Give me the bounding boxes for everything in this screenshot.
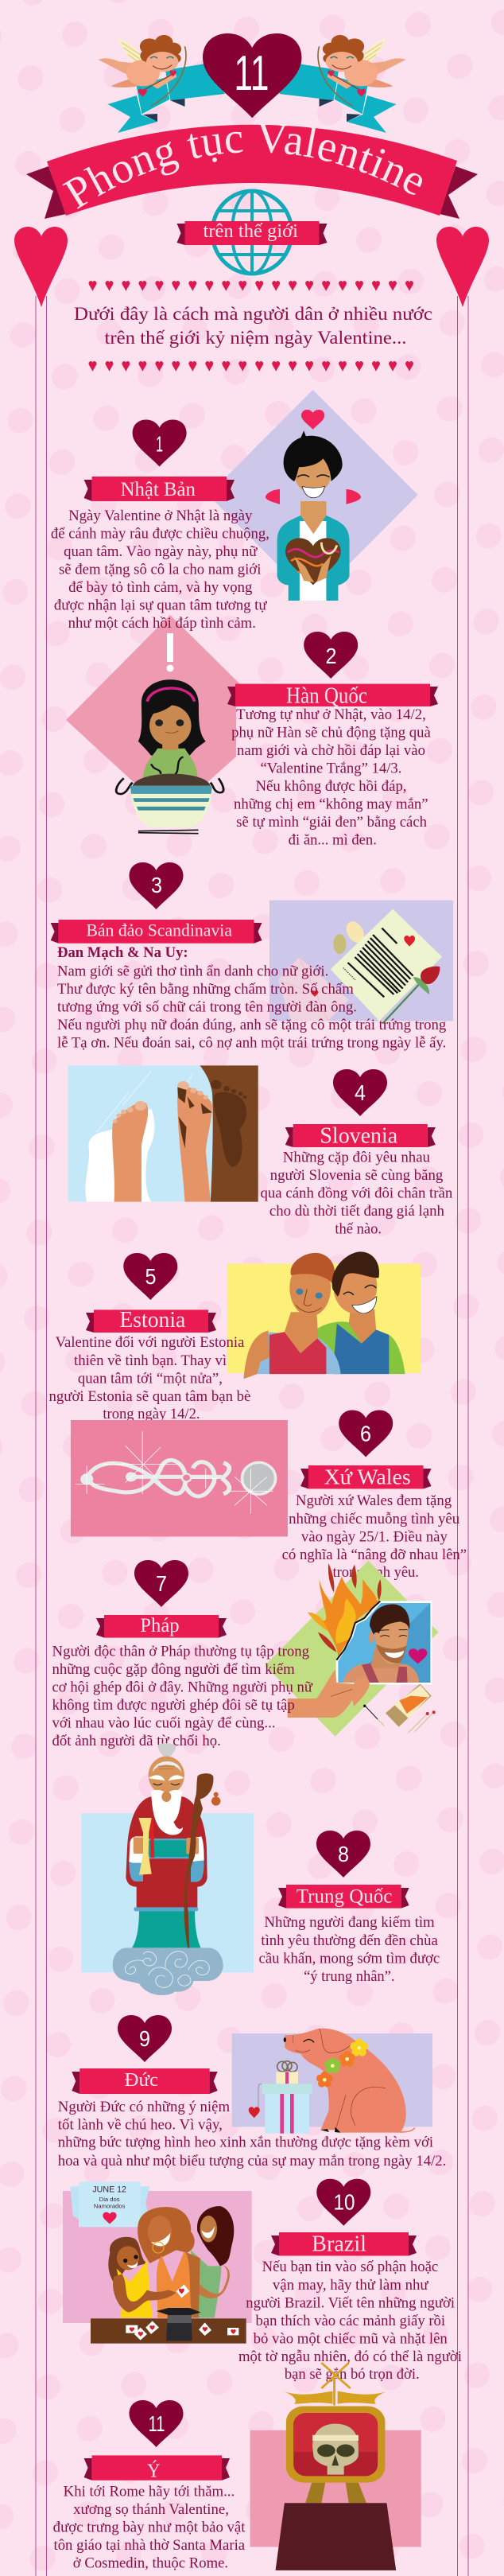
heart number 2: 2 bbox=[326, 644, 337, 668]
illustration: love spoon bbox=[71, 1420, 288, 1536]
heart number 10: 10 bbox=[334, 2190, 355, 2215]
subtitle banner bbox=[176, 221, 328, 245]
text: France: đốt ảnh người đã từ chối họ. bbox=[52, 1734, 221, 1749]
intro text: Dưới đây là cách mà người dân ở nhiều nước bbox=[74, 304, 432, 324]
banner: Scandinavia: Bán đảo Scandinavia bbox=[86, 920, 232, 940]
heart number 7: 7 bbox=[156, 1571, 167, 1596]
big heart: 11: 11 bbox=[234, 46, 269, 101]
banner: Hàn Quốc bbox=[227, 684, 438, 709]
text: France: với nhau vào lúc cuối ngày để cùng... bbox=[52, 1715, 275, 1731]
heart number 4: 4 bbox=[355, 1080, 366, 1105]
icon: globe bbox=[212, 191, 292, 274]
text: Korea: nam giới và chờ hồi đáp lại vào bbox=[237, 743, 425, 759]
banner: Ý: Ý bbox=[147, 2461, 160, 2482]
heart number 11: 11 bbox=[148, 2411, 165, 2436]
heart number 11 bbox=[129, 2400, 183, 2447]
text: Wales: Người xứ Wales đem tặng bbox=[296, 1493, 452, 1509]
text: Slovenia: Những cặp đôi yêu nhau bbox=[283, 1150, 430, 1166]
text: Scandinavia: Nam giới sẽ gửi thơ tình ẩn danh cho nữ giới. bbox=[57, 964, 328, 980]
header panel bbox=[14, 33, 489, 307]
heart number 10 bbox=[316, 2179, 370, 2226]
text: Korea: sẽ tự mình “giải đen” bằng cách bbox=[236, 815, 427, 831]
text: China: Những người đang kiếm tìm bbox=[264, 1915, 435, 1931]
panel: 8 China bbox=[81, 1743, 440, 1995]
intro text: trên thế giới kỷ niệm ngày Valentine... bbox=[105, 328, 406, 348]
banner: Pháp bbox=[96, 1615, 227, 1638]
heart number 8 bbox=[316, 1831, 370, 1878]
text: Korea bbox=[231, 707, 431, 848]
text: Wales: vào ngày 25/1. Điều này bbox=[301, 1529, 448, 1545]
text: France: những cuộc gặp đông người để tìm kiếm bbox=[52, 1662, 295, 1678]
illustration: women drawing names: JUNE 12 bbox=[92, 2185, 126, 2195]
text: France: Người độc thân ở Pháp thường tụ tập trong bbox=[52, 1644, 309, 1660]
text: Wales: có nghĩa là “nâng đỡ nhau lên” bbox=[282, 1547, 467, 1563]
banner: Nhật Bản: Nhật Bản bbox=[121, 479, 196, 500]
text: Korea: Tương tự như ở Nhật, vào 14/2, bbox=[236, 707, 426, 723]
banner: Brazil: Brazil bbox=[312, 2232, 366, 2256]
text: Italy: ở Cosmedin, thuộc Rome. bbox=[73, 2555, 228, 2571]
text: Germany: Người Đức có những ý niệm bbox=[58, 2099, 231, 2115]
text: Brazil: bạn sẽ gắn bó trọn đời. bbox=[285, 2367, 420, 2383]
text: Estonia: trong ngày 14/2. bbox=[103, 1407, 200, 1422]
text: Italy: xương sọ thánh Valentine, bbox=[73, 2502, 229, 2518]
text: Slovenia bbox=[261, 1150, 452, 1238]
row of small hearts top bbox=[89, 281, 413, 291]
text: Germany: tốt lành về chú heo. Vì vậy, bbox=[58, 2117, 223, 2133]
panel: 6 Wales bbox=[71, 1410, 467, 1581]
illustration: women drawing names: Namorados bbox=[94, 2203, 126, 2210]
text: Slovenia: cho dù thời tiết đang giá lạnh bbox=[269, 1204, 444, 1220]
text: Japan: Ngày Valentine ở Nhật là ngày bbox=[68, 508, 253, 524]
heart number 6 bbox=[339, 1410, 393, 1457]
banner: Xứ Wales: Xứ Wales bbox=[324, 1465, 411, 1488]
heart number 5: 5 bbox=[145, 1264, 156, 1289]
text: Japan: được nhận lại sự quan tâm tương tự bbox=[54, 598, 268, 614]
subtitle banner: trên thế giới bbox=[204, 221, 298, 242]
illustration: Yue Lao bbox=[81, 1743, 254, 1995]
heart number 1 bbox=[133, 420, 187, 466]
right ribbon and cupid bbox=[279, 35, 406, 133]
text: Slovenia: người Slovenia sẽ cùng băng bbox=[270, 1168, 443, 1184]
banner: Slovenia bbox=[285, 1124, 436, 1149]
text: Brazil: vận may, hãy thử làm như bbox=[273, 2278, 429, 2294]
panel: 4 Slovenia bbox=[68, 1065, 452, 1238]
text: Japan: sẽ đem tặng sô cô la cho nam giới bbox=[59, 562, 261, 578]
text: Estonia bbox=[49, 1335, 250, 1422]
heart number 5 bbox=[123, 1253, 177, 1300]
illustration: man with chocolate bbox=[208, 390, 418, 601]
text: Korea: phụ nữ Hàn sẽ chủ động tặng quà bbox=[231, 726, 431, 741]
panel: 1 Japan bbox=[51, 390, 418, 632]
text: Japan bbox=[51, 508, 269, 632]
text: China: tình yêu thường đến đền chùa bbox=[261, 1933, 438, 1949]
text: Brazil: bỏ vào một chiếc mũ và nhặt lên bbox=[254, 2331, 448, 2347]
heart number 7 bbox=[134, 1560, 188, 1607]
heart number 3: 3 bbox=[151, 873, 162, 897]
banner: Hàn Quốc: Hàn Quốc bbox=[286, 684, 367, 709]
text: Scandinavia bbox=[57, 945, 446, 1052]
panel: 10 Brazil bbox=[63, 2179, 462, 2383]
panel: 2 South Korea bbox=[66, 615, 438, 848]
text: Brazil: một tờ ngẫu nhiên, đó có thể là người bbox=[238, 2349, 462, 2365]
heart number 3 bbox=[129, 862, 183, 909]
text: China: “ý trung nhân”. bbox=[304, 1969, 394, 1985]
text: Wales: trong tình yêu. bbox=[332, 1565, 419, 1581]
title: Phong tục Valentine bbox=[62, 124, 422, 209]
banner: Estonia bbox=[86, 1308, 216, 1333]
text: Estonia: quan tâm tới “một nửa”, bbox=[78, 1372, 223, 1387]
text: China: cầu khấn, mong sớm tìm được bbox=[259, 1951, 440, 1967]
banner: Estonia: Estonia bbox=[119, 1308, 186, 1333]
banner: Ý bbox=[84, 2455, 230, 2482]
banner: Slovenia: Slovenia bbox=[320, 1124, 398, 1149]
text: Estonia: Valentine đối với người Estonia bbox=[56, 1335, 244, 1351]
text: Estonia: người Estonia sẽ quan tâm bạn bè bbox=[49, 1389, 250, 1405]
text: Italy: tôn giáo tại nhà thờ Santa Maria bbox=[54, 2538, 245, 2554]
text: Germany bbox=[58, 2099, 446, 2169]
panel: 9 Germany bbox=[58, 2015, 446, 2169]
illustration: women drawing names: Dia dos bbox=[99, 2196, 120, 2203]
panel: 7 France bbox=[52, 1560, 439, 1749]
text: Scandinavia: Nếu người phụ nữ đoán đúng, anh sẽ tặng cô một trái trứng trong bbox=[57, 1018, 446, 1033]
text: Japan: quan tâm. Vào ngày này, phụ nữ bbox=[64, 544, 258, 560]
text: Slovenia: qua cánh đồng với đôi chân trần bbox=[261, 1186, 452, 1202]
text: France bbox=[52, 1644, 313, 1749]
text: China bbox=[259, 1915, 440, 1985]
banner: Trung Quốc bbox=[278, 1885, 409, 1909]
text: Korea: “Valentine Trắng” 14/3. bbox=[261, 761, 401, 776]
main red ribbon bbox=[26, 124, 478, 219]
banner: Brazil bbox=[271, 2232, 417, 2256]
teal ribbons with cupids bbox=[98, 35, 406, 133]
text: Italy: được trưng bày như một bảo vật bbox=[53, 2520, 246, 2536]
text: France: không tìm được người ghép đôi sẽ tụ tập bbox=[52, 1698, 295, 1714]
text: Italy: Khi tới Rome hãy tới thăm... bbox=[64, 2484, 235, 2500]
text: Korea: Nếu không được hồi đáp, bbox=[256, 779, 407, 795]
banner: Đức: Đức bbox=[124, 2070, 158, 2091]
text: Brazil: người Brazil. Viết tên những người bbox=[246, 2296, 455, 2312]
banner: Scandinavia bbox=[51, 920, 262, 944]
text: Wales bbox=[282, 1493, 467, 1581]
heart number 4 bbox=[333, 1069, 387, 1116]
left ribbon and cupid bbox=[98, 35, 225, 133]
text: Scandinavia: lễ Tạ ơn. Nếu đoán sai, cô nợ anh một trái trứng trong ngày lễ ấy. bbox=[57, 1036, 446, 1052]
text: France: cơ hội ghép đôi ở đây. Những người phụ nữ bbox=[52, 1680, 313, 1696]
text: Brazil: Nếu bạn tin vào số phận hoặc bbox=[262, 2259, 438, 2275]
banner: Pháp: Pháp bbox=[140, 1615, 180, 1636]
heart number 9: 9 bbox=[139, 2026, 150, 2051]
text: Estonia: thiên về tình bạn. Thay vì bbox=[74, 1353, 227, 1369]
banner: Nhật Bản bbox=[84, 477, 235, 501]
illustration: bare feet bbox=[68, 1065, 258, 1202]
balloon heart left bbox=[14, 227, 68, 307]
text: Korea: đi ăn... mì đen. bbox=[289, 832, 377, 848]
panel: 11 Italy bbox=[53, 2363, 421, 2571]
text: Slovenia: thế nào. bbox=[335, 1222, 382, 1238]
text: Germany: những bức tượng hình heo xinh xắn thường được tặng kèm với bbox=[58, 2135, 433, 2151]
big heart: 11 bbox=[203, 33, 301, 118]
text: Italy bbox=[53, 2484, 246, 2571]
heart number 6: 6 bbox=[360, 1421, 371, 1446]
balloon heart right bbox=[436, 227, 489, 307]
text: Scandinavia: Đan Mạch & Na Uy: bbox=[57, 945, 188, 961]
illustration: skull of Saint Valentine bbox=[250, 2363, 421, 2570]
illustration: women drawing names bbox=[63, 2181, 252, 2344]
banner: Đức bbox=[72, 2068, 218, 2094]
panel: 5 Estonia bbox=[49, 1251, 421, 1422]
text: Wales: những chiếc muỗng tình yêu bbox=[289, 1512, 459, 1527]
text: Scandinavia: Thư được ký tên bằng những chấm tròn. Số chấm bbox=[57, 982, 354, 998]
text: Brazil: bạn thích vào các mảnh giấy rồi bbox=[256, 2313, 445, 2329]
illustration: girl with noodles bbox=[66, 615, 239, 834]
heart number 2 bbox=[304, 632, 358, 679]
panel: 3 Scandinavia bbox=[51, 862, 453, 1052]
heart number 8: 8 bbox=[338, 1842, 349, 1866]
intro text bbox=[74, 304, 432, 348]
text: Japan: như một cách hồi đáp tình cảm. bbox=[68, 616, 256, 632]
text: Germany: hoa và quà như một biểu tượng của sự may mắn trong ngày 14/2. bbox=[58, 2154, 446, 2169]
row of small hearts bottom bbox=[89, 361, 413, 372]
illustration: love letter bbox=[269, 901, 453, 1024]
illustration: two friends bbox=[227, 1251, 421, 1379]
illustration: pig and gift bbox=[232, 2029, 432, 2134]
text: Korea: những chị em “không may mắn” bbox=[234, 797, 428, 813]
heart number 1: 1 bbox=[156, 431, 163, 457]
text: Scandinavia: tương ứng với số chữ cái trong tên người đàn ông. bbox=[57, 1000, 357, 1016]
banner: Trung Quốc: Trung Quốc bbox=[297, 1885, 392, 1907]
text: Japan: để cánh mày râu được chiều chuộng, bbox=[51, 527, 269, 543]
text: Brazil bbox=[238, 2259, 462, 2383]
banner: Xứ Wales bbox=[300, 1465, 431, 1488]
illustration: burning photo bbox=[265, 1561, 439, 1737]
text: Japan: để bày tỏ tình cảm, và hy vọng bbox=[68, 580, 252, 596]
heart number 9 bbox=[118, 2015, 172, 2062]
